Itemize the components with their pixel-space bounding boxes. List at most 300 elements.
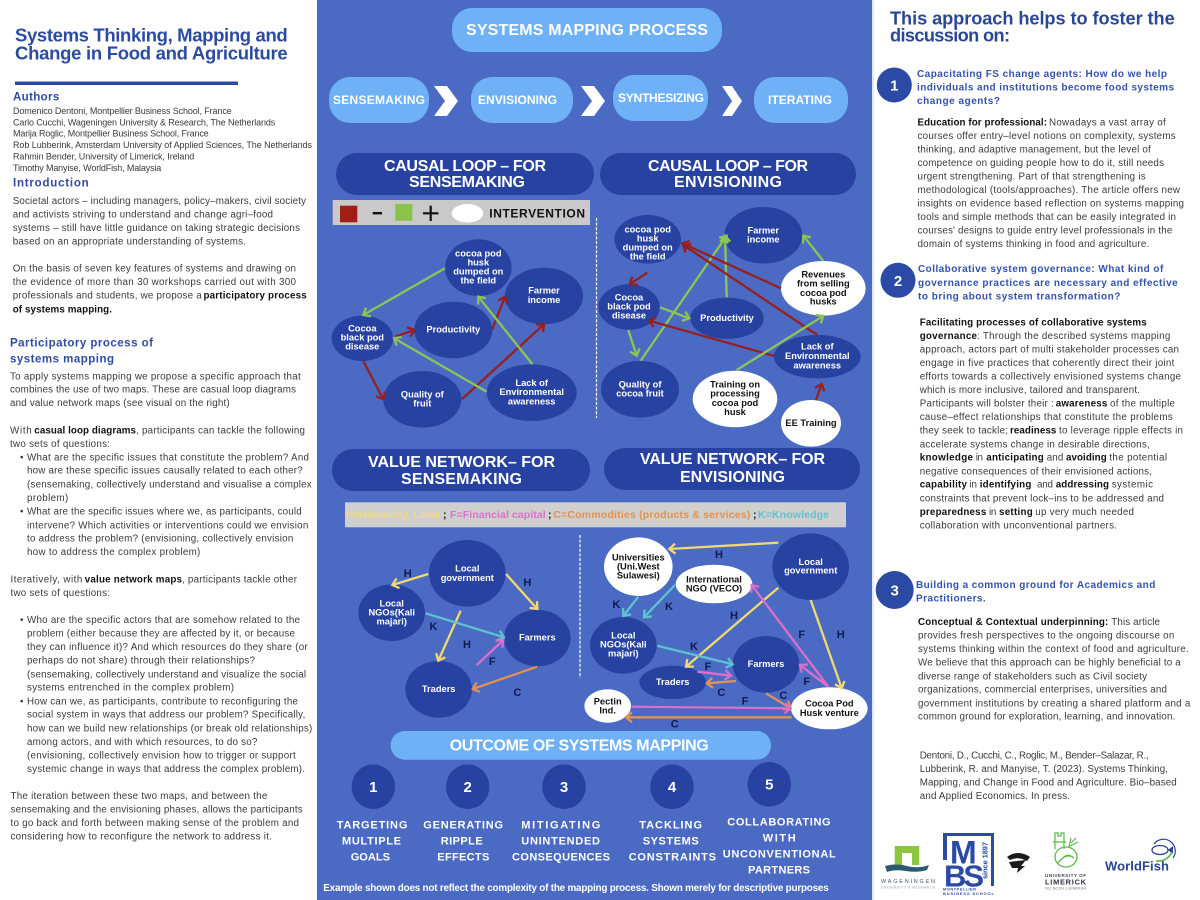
text block: author list: Timothy Manyise, WorldFish, Malaysia: [13, 163, 161, 173]
section 1 body: insights on evidence based reflection on systems mapping: [918, 199, 1184, 210]
section 1 heading: individuals and institutions become food systems: [917, 83, 1174, 94]
node: EE training: EE Training: [785, 418, 837, 428]
node: lack of environmental awareness: awareness: [508, 396, 555, 406]
heading pill: value network for envisioning: ENVISIONING: [680, 469, 785, 486]
arrow: traders to farmers: [697, 672, 731, 676]
section 1 body: Education for professional:: [918, 117, 1047, 128]
outcome 5: 5: [765, 776, 773, 794]
arrow: sensemaking to envisioning: [434, 86, 458, 116]
section 2 body: systemic: [1112, 480, 1153, 491]
legend: value network: F=Financial capital: [450, 509, 546, 521]
heading: foster the discussion: discussion on:: [890, 25, 1010, 45]
section 2 body: approach, actors part of multi stakeholder processes can: [920, 344, 1179, 355]
outcome 4: SYSTEMS: [643, 835, 699, 847]
panel: left column: [0, 0, 317, 900]
section 2 heading: governance practices are necessary and effective: [918, 278, 1178, 289]
heading pill: value network for envisioning: [604, 448, 860, 490]
node: productivity: Productivity: [700, 313, 755, 323]
section 2 body: [919, 317, 1183, 531]
arrow: quality to income: [641, 236, 727, 361]
heading pill: value network for sensemaking: [332, 449, 590, 491]
arrow: EE training to awareness: [816, 384, 822, 400]
arrow: disease to quality: [628, 330, 637, 356]
edge labels: K: [429, 621, 437, 633]
bullet list: value network questions: How can we, as participants, contribute to reconfiguring the: [27, 696, 299, 707]
section 2 body: in: [989, 507, 996, 518]
citation: Dentoni, D., Cucchi, C., Roglic, M., Bender–Salazar, R.,: [920, 750, 1149, 761]
text block: value network intro: , participants tackle other: [182, 575, 298, 586]
outcome 5: [723, 762, 836, 876]
section 2 body: of the multiple: [1110, 399, 1176, 410]
node: farmer income: [505, 268, 583, 324]
text block: value network intro: value network maps: [85, 575, 183, 586]
logo: WorldFish: [1105, 839, 1175, 874]
logo: Wageningen: WAGENINGEN: [881, 879, 935, 885]
edge labels: K: [690, 641, 698, 653]
node: cocoa pod husk: [614, 215, 681, 264]
outcome 2: GENERATING: [423, 819, 503, 831]
section 2 body: efforts towards a collectively envisioned systems change: [920, 372, 1182, 383]
text block: author list: Carlo Cucchi, Wageningen University & Research, The Netherlands: [13, 117, 276, 127]
node: farmers: [504, 610, 571, 666]
section 2 body: they seek to tackle;: [920, 426, 1008, 437]
text block: introduction: and activists striving to understand and change agri–food: [13, 210, 273, 220]
text block: approach: combines the use of two maps. These are casual loop diagrams: [10, 385, 296, 396]
legend: value network: ;: [443, 509, 446, 521]
arrow: government to traders: [686, 588, 778, 667]
arrow: venture to international NGO: [752, 585, 828, 687]
text block: approach: To apply systems mapping we propose a specific approach that: [10, 371, 301, 382]
text block: introduction: [13, 196, 307, 315]
section 1 body: [918, 117, 1184, 250]
legend: value network: ;: [548, 509, 552, 521]
arrow: productivity to income: [725, 236, 727, 297]
section 2 body: accelerate systems change in desirable directions,: [920, 439, 1150, 450]
text block: author list: Rahmin Bender, University of Limerick, Ireland: [13, 151, 194, 161]
node: cocoa black pod disease: black pod: [607, 302, 651, 312]
section 2 heading: Collaborative system governance: What kind of: [918, 264, 1164, 275]
outcome 3: MITIGATING: [521, 819, 600, 831]
section 2 body: collaboration with unconventional partners.: [920, 520, 1117, 531]
section 3 body: provides fresh perspectives to the ongoing discourse on: [918, 631, 1174, 642]
edge labels: C: [513, 687, 521, 699]
text block: author list: [13, 106, 312, 173]
section 1 body: tools and simple methods that can be easily integrated in: [918, 212, 1176, 223]
arrow: awareness to husk: [683, 245, 817, 335]
node: farmer income: Farmer: [528, 286, 560, 296]
outcome 4: [629, 764, 716, 863]
heading: participatory process: [10, 338, 153, 365]
text block: author list: Domenico Dentoni, Montpellier Business School, France: [13, 106, 232, 116]
edge labels: H: [715, 549, 723, 561]
logo: wave mark: [1007, 853, 1030, 873]
title: Systems Thinking, Mapping and: [15, 25, 288, 46]
logo: University of Limerick: [1045, 833, 1087, 890]
arrow: venture to farmers: [800, 665, 828, 687]
node: training on processing: [693, 371, 777, 427]
section 3 body: systems thinking within the context of food and agriculture.: [918, 644, 1189, 655]
section 2 body: capability: [920, 480, 968, 491]
node: lack of environmental awareness: Environmental: [785, 351, 850, 361]
divider: value network maps: [579, 535, 581, 678]
node: international NGO: NGO (VECO): [686, 583, 742, 593]
edge labels: K: [665, 601, 673, 613]
outcome 1: 1: [369, 779, 377, 796]
section 2 body: and: [1037, 480, 1053, 491]
node: farmer income: [724, 207, 802, 264]
node: local NGOs: Local: [380, 598, 404, 608]
arrow: farmers to venture: [766, 693, 791, 708]
section 2 body: constraints that prevent lock–ins to be addressed and: [920, 493, 1164, 504]
node: local NGOs: Local: [611, 631, 635, 641]
arrow: farmers to traders: [707, 681, 736, 683]
edge labels: F: [798, 629, 805, 641]
node: local NGOs: NGOs(Kali: [600, 640, 647, 650]
bullet list: causal loop questions: What are the specific issues where we, as participants, could: [27, 507, 302, 518]
node: cocoa black pod disease: disease: [345, 342, 379, 352]
arrow: awareness to disease: [649, 321, 774, 356]
edge labels: C: [717, 687, 725, 699]
edge labels: H: [523, 577, 531, 589]
node: local NGOs: NGOs(Kali: [368, 607, 415, 617]
arrow: husk to disease: [363, 268, 445, 315]
node: lack of environmental awareness: Lack of: [515, 378, 549, 388]
heading pill: causal loop for sensemaking: [336, 153, 594, 195]
heading: foster the discussion: This approach helps to foster the: [890, 8, 1175, 28]
outcome 3: UNINTENDED: [521, 835, 600, 847]
arrow: government to universities: [669, 543, 778, 549]
section 3 body: common ground for exploration, learning, and innovation.: [918, 712, 1175, 723]
node: international NGO: International: [686, 574, 742, 584]
arrow: universities to NGOs: [623, 597, 638, 616]
section 2 body: in: [969, 480, 977, 491]
node: quality of fruit: Quality of: [401, 389, 445, 399]
section 2 number: 2: [894, 273, 902, 290]
logo: Montpellier Business School: BUSINESS SCHOOL: [943, 891, 995, 896]
section 2 body: up very much needed: [1035, 507, 1134, 518]
node: cocoa black pod disease: [332, 316, 393, 361]
section 2 body: avoiding: [1066, 453, 1107, 464]
legend: causal loop: INTERVENTION: [489, 206, 585, 220]
section 2 body: readiness: [1010, 426, 1057, 437]
heading pill: value network for sensemaking: SENSEMAKING: [401, 471, 522, 488]
edge labels: [612, 549, 845, 730]
step: envisioning: [471, 77, 573, 123]
node: quality of cocoa fruit: [601, 361, 679, 418]
title: Change in Food and Agriculture: [15, 42, 288, 63]
arrow: revenues to husk: [682, 243, 781, 288]
node: cocoa pod husk: the field: [630, 252, 666, 262]
edge labels: F: [489, 656, 496, 668]
logo: University of Limerick: LIMERICK: [1045, 878, 1087, 886]
node: local government: government: [441, 573, 494, 583]
text block: introduction: systems – still have little guidance on taking strategic decisions: [13, 223, 300, 234]
outcome 5: PARTNERS: [748, 864, 810, 876]
text block: introduction: On the basis of seven key features of systems and drawing on: [13, 264, 296, 275]
edge labels: H: [404, 568, 412, 580]
bullet list: value network questions: systems entrenched in the complex problem): [27, 683, 234, 694]
footnote: Example shown does not reflect the complexity of the mapping process. Shown merely for descriptive purposes: [323, 883, 829, 894]
step: synthesizing: SYNTHESIZING: [618, 91, 704, 105]
section 2 body: which is more inclusive, tailored and transparent.: [919, 385, 1140, 396]
text block: author list: Rob Lubberink, Amsterdam University of Applied Sciences, The Netherlands: [13, 140, 312, 150]
section 2 body: cause–effect relationships that constitute the problems: [920, 412, 1173, 423]
logo: Wageningen: UNIVERSITY & RESEARCH: [881, 886, 936, 890]
section 3 body: organizations, commercial enterprises, universities and: [918, 685, 1167, 696]
node: pectin industry: Ind.: [599, 705, 616, 715]
node: productivity: Productivity: [426, 325, 481, 335]
text block: iteration: considering how to reconfigure the network to address it.: [10, 831, 272, 842]
arrow: farmers to traders: [473, 667, 537, 689]
node: training on processing: husk: [724, 407, 747, 417]
arrow: government to venture: [811, 600, 842, 688]
heading pill: systems mapping process: [452, 8, 722, 52]
arrow: venture to pectin: [626, 716, 792, 718]
step: synthesizing: [613, 75, 708, 121]
bullet list: causal loop questions: [20, 452, 312, 558]
node: cocoa black pod disease: black pod: [341, 333, 384, 343]
heading pill: systems mapping process: SYSTEMS MAPPING PROCESS: [466, 22, 708, 39]
edge labels: F: [705, 661, 712, 673]
section 2 body: the potential: [1109, 453, 1167, 464]
step: iterating: ITERATING: [768, 93, 832, 107]
node: universities: Universities: [612, 553, 665, 563]
heading pill: outcome of systems mapping: [391, 731, 771, 760]
node: traders: Traders: [656, 677, 689, 687]
node: local NGOs: [358, 584, 425, 641]
edge labels: C: [779, 690, 787, 702]
chart: causal loop envisioning: [598, 207, 866, 447]
section 2 body: preparedness: [920, 507, 987, 518]
edge labels: H: [730, 610, 738, 622]
legend: value network: H=Hierarchy, Laws: [346, 509, 440, 521]
edge labels: H: [463, 639, 471, 651]
section 1 body: thinking, and adaptive management, but the level of: [918, 144, 1151, 155]
node: lack of environmental awareness: Lack of: [801, 342, 834, 352]
heading pill: value network for sensemaking: VALUE NETWORK– FOR: [368, 454, 555, 471]
bullet list: value network questions: problem (either because they are affected by it, or because: [27, 628, 296, 639]
section 1 heading: [917, 69, 1174, 107]
panel: right column: [872, 0, 1191, 900]
section 2 body: Facilitating processes of collaborative systems: [920, 317, 1147, 328]
node: cocoa pod husk: dumped on: [623, 243, 673, 253]
bullet list: value network questions: (envisioning, collectively envision how to trigger or support: [27, 750, 296, 761]
logo: Montpellier Business School: BS: [944, 858, 984, 894]
node: local NGOs: majari): [608, 649, 639, 659]
citation: Lubberink, R. and Manyise, T. (2023). Systems Thinking,: [920, 764, 1168, 775]
outcome 1: MULTIPLE: [342, 835, 401, 847]
node: pectin industry: Pectin: [594, 696, 622, 706]
heading: participatory process: Participatory process of: [10, 338, 153, 350]
outcome 5: UNCONVENTIONAL: [723, 848, 836, 860]
outcome 2: EFFECTS: [437, 851, 489, 863]
node: cocoa pod husk: cocoa pod: [624, 224, 671, 234]
text block: author list: Marija Roglic, Montpellier Business School, France: [13, 129, 209, 139]
section 2 number: [880, 263, 916, 298]
bullet list: value network questions: •: [20, 696, 24, 707]
node: traders: Traders: [422, 684, 455, 694]
node: universities: (Uni.West: [617, 562, 660, 572]
section 3 number: 3: [891, 582, 899, 600]
arrow: training to revenues: [737, 316, 823, 370]
section 1 body: courses' designs to guide entry level professionals in the: [918, 226, 1173, 237]
section 3 heading: [916, 580, 1155, 605]
panel: centre systems mapping: [317, 0, 872, 900]
node: traders: [639, 666, 706, 699]
node: cocoa black pod disease: [598, 284, 660, 330]
text block: approach: two sets of questions:: [10, 439, 110, 450]
heading pill: causal loop for envisioning: ENVISIONING: [674, 174, 782, 191]
arrow: international NGO to NGOs: [644, 585, 675, 617]
section 1 number: 1: [890, 78, 898, 94]
arrow: disease to quality: [363, 361, 383, 399]
section 1 body: urgent strengthening. Part of that strengthening is: [918, 172, 1146, 183]
node: cocoa pod husk: [445, 239, 512, 296]
legend: value network: ;: [753, 509, 756, 521]
node: cocoa pod husk: husk: [467, 258, 490, 268]
outcome 2: [423, 764, 503, 863]
section 3 number: [876, 571, 914, 609]
section 2 body: engage in five practices that coherently direct their joint: [920, 358, 1175, 369]
section 3 heading: Practitioners.: [916, 594, 986, 605]
section 3 body: This article: [1111, 617, 1161, 628]
edge labels: F: [803, 676, 810, 688]
outcome 1: [337, 764, 407, 863]
node: quality of cocoa fruit: cocoa fruit: [616, 388, 664, 398]
outcome 3: 3: [560, 779, 568, 796]
heading pill: value network for envisioning: VALUE NETWORK– FOR: [640, 451, 825, 468]
outcome 3: [512, 764, 610, 863]
section 2 body: in: [976, 453, 983, 464]
node: cocoa pod husk venture: [791, 687, 868, 729]
node: universities: Sulawesi): [617, 571, 660, 581]
legend: value network: C=Commodities (products & services): [553, 509, 750, 521]
node: lack of environmental awareness: [774, 335, 861, 378]
legend: causal loop: [333, 200, 590, 225]
heading pill: causal loop for sensemaking: SENSEMAKING: [409, 174, 525, 191]
outcome 3: CONSEQUENCES: [512, 851, 610, 863]
node: lack of environmental awareness: Environmental: [499, 387, 564, 397]
node: local NGOs: [590, 617, 657, 674]
legend: value network: [345, 502, 846, 527]
text block: iteration: The iteration between these two maps, and between the: [10, 791, 268, 802]
bullet list: causal loop questions: •: [20, 452, 24, 463]
citation: [920, 750, 1177, 802]
edge labels: K: [612, 599, 620, 611]
edge labels: F: [742, 696, 749, 708]
arrow: NGOs to farmers: [657, 646, 733, 664]
arrow: revenues to income: [803, 236, 823, 261]
bullet list: causal loop questions: problem): [27, 493, 68, 504]
text block: iteration: sensemaking and the envisioning phases, allows the participants: [10, 804, 303, 815]
bullet list: value network questions: they can influence it)? And which resources do they share (or: [27, 642, 308, 653]
section 1 body: Nowadays a vast array of: [1049, 117, 1166, 128]
section 2 body: governance: [920, 331, 978, 342]
node: cocoa black pod disease: disease: [612, 311, 646, 321]
heading pill: causal loop for envisioning: CAUSAL LOOP – FOR: [648, 158, 808, 175]
edge labels: [404, 568, 531, 699]
node: training on processing: Training on: [710, 380, 760, 390]
section 3 body: [918, 617, 1191, 723]
node: cocoa pod husk: the field: [460, 276, 496, 286]
bullet list: causal loop questions: •: [20, 507, 24, 518]
section 2 body: anticipating: [986, 453, 1044, 464]
node: quality of cocoa fruit: Quality of: [619, 379, 662, 389]
edge labels: H: [837, 629, 845, 641]
node: universities: [604, 537, 673, 596]
text block: introduction: the evidence of more than 30 workshops carried out with 300: [13, 277, 297, 288]
node: lack of environmental awareness: awareness: [794, 360, 841, 370]
node: quality of fruit: fruit: [413, 398, 431, 408]
bullet list: causal loop questions: intervene? Which activities or interventions could we envision: [27, 520, 308, 531]
section 1 heading: Capacitating FS change agents: How do we help: [917, 69, 1167, 80]
outcome 4: CONSTRAINTS: [629, 851, 716, 863]
bullet list: value network questions: (sensemaking, collectively understand and visualize the social: [27, 669, 306, 680]
text block: introduction: participatory process: [204, 291, 307, 302]
step: envisioning: ENVISIONING: [478, 93, 557, 107]
section 1 number: [877, 68, 912, 102]
text block: value network intro: [10, 575, 298, 599]
text block: introduction: based on an appropriate understanding of systems.: [13, 237, 246, 248]
logo: Wageningen: [881, 846, 936, 890]
outcome 4: TACKLING: [639, 819, 702, 831]
section 1 body: courses offer entry–level notions on complexity, systems: [918, 131, 1176, 142]
logo: University of Limerick: OLLSCOIL LUIMNIGH: [1045, 886, 1087, 890]
bullet list: causal loop questions: how to address the complex problem): [27, 547, 200, 558]
logo: WorldFish: WorldFish: [1105, 859, 1169, 874]
section 2 heading: to bring about system transformation?: [918, 291, 1120, 302]
bullet list: value network questions: Who are the specific actors that are somehow related to the: [27, 615, 301, 626]
bullet list: causal loop questions: to address the problem? (envisioning, collectively envision: [27, 534, 293, 545]
heading: authors: Authors: [13, 91, 59, 103]
node: local government: government: [784, 566, 837, 576]
node: farmers: Farmers: [519, 633, 556, 643]
section 2 heading: [918, 264, 1178, 302]
chart: value network envisioning: [584, 533, 868, 730]
node: local government: [429, 540, 506, 607]
node: local NGOs: majari): [376, 617, 407, 627]
node: farmer income: income: [528, 295, 560, 305]
heading pill: causal loop for envisioning: [600, 153, 856, 195]
logo: Montpellier Business School: M: [950, 834, 977, 870]
node: farmer income: income: [747, 235, 780, 245]
node: local government: [772, 533, 849, 600]
bullet list: value network questions: social system in ways that address our problem? Specifically,: [27, 710, 305, 721]
outcome 2: RIPPLE: [441, 835, 483, 847]
bullet list: value network questions: how can we build new relationships (or break old relationships): [27, 723, 312, 734]
node: EE training: [781, 400, 841, 447]
node: lack of environmental awareness: [487, 364, 577, 421]
arrow: husk to disease: [630, 273, 647, 284]
arrow: government to farmers: [506, 574, 537, 609]
arrow: envisioning to synthesizing: [581, 86, 605, 116]
section 2 body: and: [1047, 453, 1063, 464]
arrow: NGOs to farmers: [426, 613, 504, 637]
bullet list: value network questions: perhaps do not share) through their relationships?: [27, 656, 256, 667]
text block: iteration: [10, 791, 303, 842]
arrow: productivity to income: [492, 297, 505, 329]
heading pill: outcome of systems mapping: OUTCOME OF SYSTEMS MAPPING: [450, 738, 709, 754]
title underline: [15, 82, 238, 85]
edge labels: C: [671, 718, 679, 730]
bullet list: value network questions: •: [20, 615, 24, 626]
arrow: quality to income: [462, 324, 544, 399]
heading: foster the discussion: [890, 8, 1175, 45]
outcome 4: 4: [668, 779, 677, 796]
node: quality of fruit: [383, 371, 461, 428]
node: training on processing: processing: [710, 389, 760, 399]
text block: introduction: Societal actors – including managers, policy–makers, civil society: [13, 196, 306, 207]
